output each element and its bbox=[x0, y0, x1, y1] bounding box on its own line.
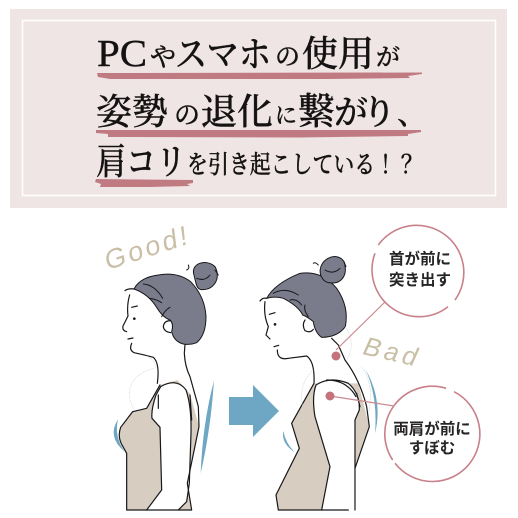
headline text: 姿勢 bbox=[96, 92, 168, 132]
panel: headline banner bbox=[10, 9, 507, 208]
neck circle bbox=[372, 225, 464, 317]
label: Bad: Bad bbox=[361, 331, 424, 373]
shoulder callout text: 両肩が前に bbox=[393, 419, 471, 438]
headline text: を引き起こしている！？ bbox=[187, 151, 417, 179]
shoulder circle bbox=[385, 386, 480, 481]
headline text: の bbox=[275, 44, 300, 71]
good hair strands bbox=[143, 265, 218, 317]
bad guide arcs bbox=[302, 327, 371, 413]
bad tank top bbox=[276, 383, 369, 510]
good neck guide arc bbox=[129, 356, 156, 408]
callout: neck bbox=[332, 225, 464, 360]
good hair bun bbox=[193, 263, 217, 290]
headline text: がり bbox=[334, 95, 396, 132]
good body outlines bbox=[119, 289, 199, 510]
neck callout text: 首が前に bbox=[389, 249, 451, 268]
bad eye bbox=[274, 323, 276, 326]
good hair bbox=[134, 274, 206, 344]
bad body outlines bbox=[260, 298, 369, 510]
headline text: PC bbox=[97, 33, 147, 75]
bad hair bun bbox=[320, 257, 345, 283]
bad blue motion marks bbox=[365, 369, 378, 433]
good eye bbox=[133, 317, 136, 320]
headline text: 、 bbox=[397, 98, 427, 131]
headline text: 退化 bbox=[201, 92, 273, 132]
bad arm bbox=[314, 380, 359, 510]
headline text: 繋 bbox=[298, 91, 335, 133]
good arm bbox=[147, 384, 191, 510]
callout: neck: 突き出す bbox=[389, 271, 451, 289]
headline text: 使用 bbox=[302, 34, 374, 74]
headline text: 肩コリ bbox=[96, 142, 186, 182]
callout: shoulders: すぼむ bbox=[409, 439, 455, 457]
figure: good posture bbox=[114, 263, 218, 510]
shoulder leader line and dot bbox=[330, 396, 394, 406]
headline text: の bbox=[174, 101, 200, 130]
headline text: に bbox=[275, 103, 297, 128]
headline text: スマホ bbox=[175, 35, 271, 76]
good tank top bbox=[119, 380, 199, 510]
underline strokes bbox=[95, 72, 422, 187]
bad hair strands bbox=[273, 262, 346, 317]
good blue motion marks bbox=[201, 381, 214, 473]
bad hair bbox=[267, 273, 346, 337]
figure: bad posture bbox=[260, 257, 378, 510]
callout: shoulders bbox=[326, 386, 480, 481]
neck leader line and dot bbox=[336, 302, 385, 350]
label: Good: Good! bbox=[101, 220, 194, 276]
headline text: や bbox=[150, 43, 176, 72]
headline text bbox=[96, 33, 427, 182]
arrow bbox=[229, 385, 279, 437]
headline text: が bbox=[376, 45, 400, 71]
